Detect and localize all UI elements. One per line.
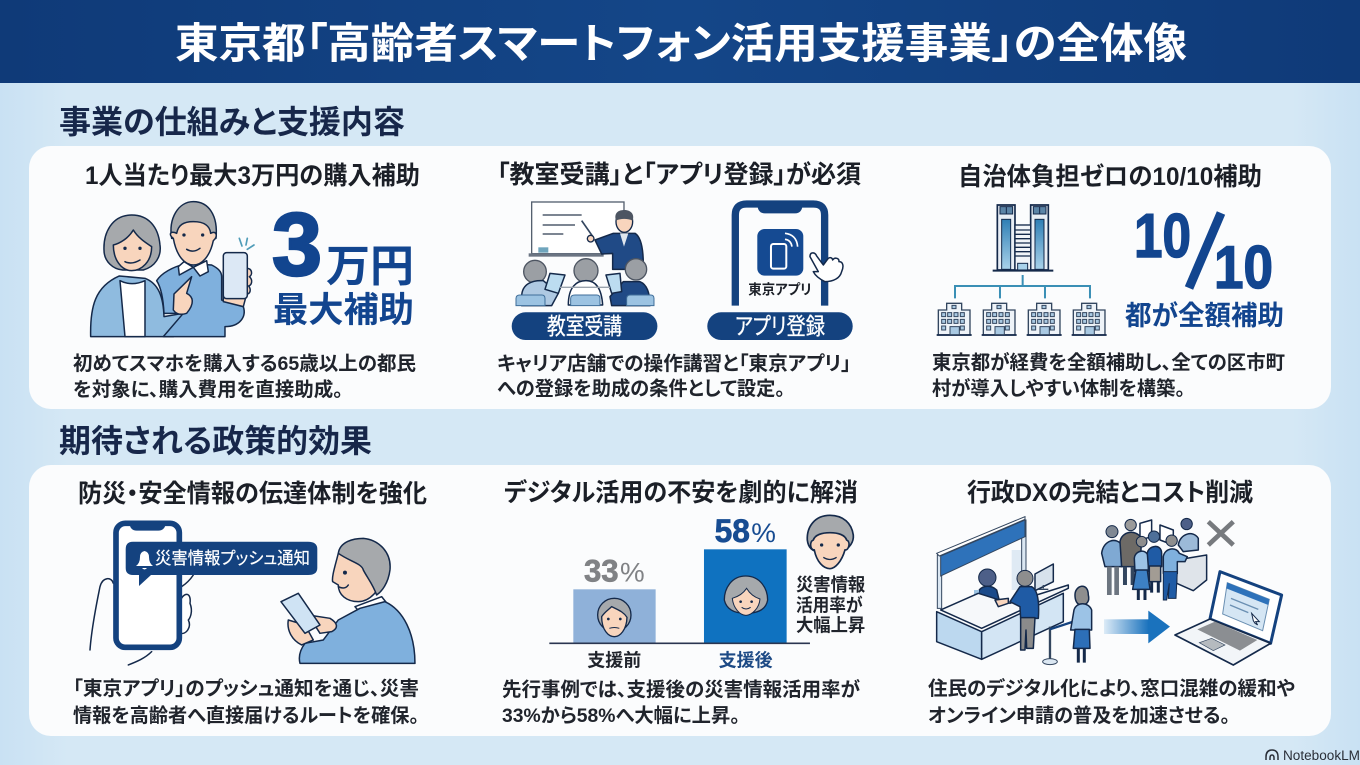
card: administrative DX xyxy=(928,479,1295,727)
big figure: 3万円 最大補助: 万円 xyxy=(326,242,414,291)
bar: after support 58%: 58 xyxy=(715,513,750,549)
illustration: service counter xyxy=(937,517,1092,665)
illustration: senior couple with smartphone xyxy=(91,202,254,337)
card body: を対象に、購入費用を直接助成。 xyxy=(73,378,343,401)
callout: sharp increase note xyxy=(796,575,865,636)
card: purchase subsidy xyxy=(73,162,420,401)
card title: 防災・安全情報の伝達体制を強化 xyxy=(78,480,427,508)
card body: オンライン申請の普及を加速させる。 xyxy=(928,705,1230,727)
bar chart: before and after support xyxy=(549,513,865,671)
bar: after support 58% xyxy=(704,513,787,643)
card title: デジタル活用の不安を劇的に解消 xyxy=(504,478,858,507)
illustration: phone with hand xyxy=(90,523,193,665)
callout: sharp increase note: 災害情報 xyxy=(796,575,865,595)
card body xyxy=(502,678,861,727)
card title: 自治体負担ゼロの10/10補助 xyxy=(958,162,1262,191)
big figure: 10/10 都が全額補助: 10 xyxy=(1134,202,1191,271)
big figure: 3万円 最大補助: 3 xyxy=(272,194,322,294)
watermark: NotebookLM: NotebookLM xyxy=(1283,748,1360,763)
bar: after support 58%: % xyxy=(751,518,776,548)
bar: before support 33%: % xyxy=(620,558,645,588)
callout: sharp increase note: 大幅上昇 xyxy=(796,616,865,636)
card body: 先行事例では、支援後の災害情報活用率が xyxy=(502,678,861,701)
card body xyxy=(497,353,851,400)
axis label: before: 支援前 xyxy=(587,651,641,671)
illustration: laptop xyxy=(1175,572,1282,665)
card body: キャリア店舗での操作講習と「東京アプリ」 xyxy=(497,353,851,375)
title banner: 東京都「高齢者スマートフォン活用支援事業」の全体像 xyxy=(175,20,1187,67)
heading: expected policy effects: 期待される政策的効果 xyxy=(59,423,372,459)
illustration: senior man using smartphone xyxy=(281,538,415,663)
big figure: 3万円 最大補助: 最大補助 xyxy=(273,291,414,330)
bar: before support 33% xyxy=(573,554,656,643)
card title: 「教室受講」と「アプリ登録」が必須 xyxy=(497,160,861,189)
callout: sharp increase note: 活用率が xyxy=(796,594,863,615)
callout: disaster push notification: 災害情報プッシュ通知 xyxy=(155,549,310,568)
label pill: classroom: 教室受講 xyxy=(547,313,622,339)
card body: への登録を助成の条件として設定。 xyxy=(497,377,785,400)
label pill: classroom xyxy=(512,312,657,340)
card title: 1人当たり最大3万円の購入補助 xyxy=(85,162,420,190)
icon: smiling senior xyxy=(807,515,853,569)
panel: mechanism and support xyxy=(29,146,1331,409)
title banner xyxy=(0,0,1360,83)
card body: 村が導入しやすい体制を構築。 xyxy=(932,377,1185,400)
axis label: after: 支援後 xyxy=(719,651,773,671)
card: disaster information xyxy=(73,480,427,727)
illustration: Tokyo app phone: 東京アプリ xyxy=(748,281,812,297)
callout: disaster push notification xyxy=(126,542,317,586)
card body xyxy=(928,677,1295,727)
label pill: app registration: アプリ登録 xyxy=(735,313,825,339)
card: full subsidy xyxy=(932,162,1285,400)
card body: 情報を高齢者へ直接届けるルートを確保。 xyxy=(73,704,419,727)
arrow: toward online xyxy=(1104,611,1170,643)
card: usage rate xyxy=(502,478,865,727)
card body: 「東京アプリ」のプッシュ通知を通じ、災害 xyxy=(73,678,419,700)
card: classroom and app xyxy=(497,160,861,400)
illustration: city hall and municipalities xyxy=(937,205,1107,335)
big figure: 3万円 最大補助 xyxy=(272,194,414,330)
illustration: crowded window with X xyxy=(1102,518,1233,600)
illustration: Tokyo app phone xyxy=(735,203,843,306)
card body: 東京都が経費を全額補助し、全ての区市町 xyxy=(932,351,1285,374)
illustration: classroom xyxy=(516,202,654,306)
heading: mechanism and support: 事業の仕組みと支援内容 xyxy=(59,104,405,140)
card body: 33%から58%へ大幅に上昇。 xyxy=(502,705,740,727)
card body: 初めてスマホを購入する65歳以上の都民 xyxy=(73,353,416,375)
bar: before support 33%: 33 xyxy=(584,554,619,589)
card body xyxy=(73,353,416,401)
big figure: 10/10 都が全額補助: 都が全額補助 xyxy=(1125,300,1284,331)
card body xyxy=(73,678,419,727)
card body: 住民のデジタル化により、窓口混雑の緩和や xyxy=(928,677,1295,700)
panel: expected policy effects xyxy=(29,465,1331,736)
card title: 行政DXの完結とコスト削減 xyxy=(967,479,1253,507)
big figure: 10/10 都が全額補助: 10 xyxy=(1214,234,1273,301)
card body xyxy=(932,351,1285,400)
big figure: 10/10 都が全額補助 xyxy=(1125,202,1284,331)
label pill: app registration xyxy=(707,312,853,340)
